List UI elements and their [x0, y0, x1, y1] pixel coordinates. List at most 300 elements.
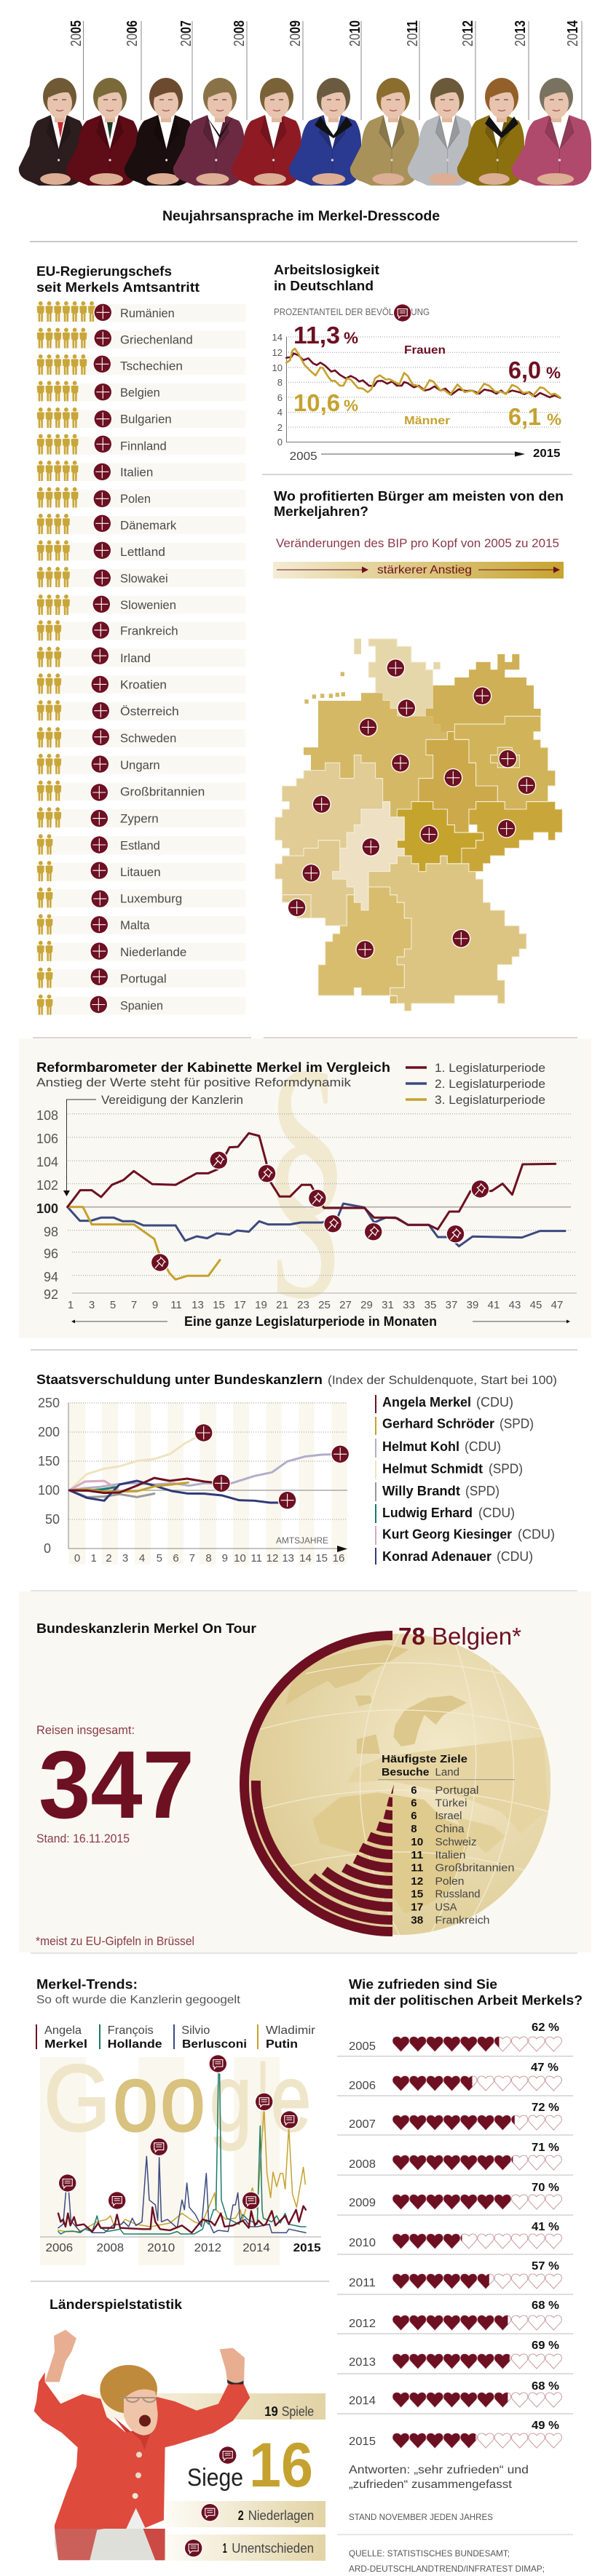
axes and gridlines: 150	[38, 1454, 60, 1468]
heading: Wo profitierten: Wo profitierten Bürger am meisten von den	[274, 489, 564, 504]
label: 2 Niederlagen: Niederlagen	[248, 2508, 314, 2523]
country names: Malta	[120, 918, 150, 932]
wedge tip	[391, 1784, 394, 1794]
axes and gridlines: 23	[297, 1299, 309, 1311]
heading: Reformbarometer: Reformbarometer der Kabinette Merkel im Vergleich	[36, 1060, 390, 1075]
bar: Spiele	[60, 2393, 325, 2420]
axes and gridlines: 50	[45, 1512, 60, 1527]
legend: politicians: Merkel	[44, 2038, 87, 2051]
table: Häufigste Ziele: Häufigste Ziele	[382, 1753, 467, 1765]
gridlines and axis: 6	[277, 392, 283, 403]
label: 19 Spiele: Spiele	[282, 2404, 314, 2419]
row 2012: 2012	[349, 2318, 376, 2330]
country names: Estland	[120, 838, 160, 852]
heading: Wie zufrieden: Wie zufrieden sind Sie	[349, 1977, 497, 1992]
legend: 2. Legislaturperiode	[435, 1077, 545, 1091]
row 2015	[349, 2420, 561, 2448]
line: Frauen	[286, 354, 560, 398]
panel: EU heads of government	[36, 264, 245, 1015]
state: Berlin	[491, 747, 519, 768]
axes and gridlines: 9	[152, 1299, 158, 1311]
panel: Reformbarometer	[19, 1011, 591, 1338]
country names: Großbritannien	[120, 785, 205, 799]
heading: Reformbarometer: Anstieg der Werte steht für positive Reformdynamik	[36, 1076, 352, 1089]
row 2007: 72 %	[532, 2102, 559, 2114]
time axis: 2006	[46, 2242, 73, 2254]
table: Häufigste Ziele: Russland	[435, 1888, 481, 1901]
year labels: 2014	[565, 20, 581, 47]
table: Häufigste Ziele: Land	[435, 1766, 459, 1778]
table: Häufigste Ziele: Portugal	[435, 1784, 479, 1797]
heading: Arbeitslosigkeit: Arbeitslosigkeit	[274, 263, 379, 277]
axes and gridlines: 5	[110, 1299, 116, 1311]
heading: EU-Regierungschefs	[36, 264, 200, 295]
year labels: 2005	[68, 20, 84, 47]
axes and gridlines: 10	[234, 1552, 246, 1565]
panel: Länderspielstatistik	[34, 2297, 325, 2561]
table: Häufigste Ziele: USA	[435, 1901, 457, 1914]
country names: Tschechien	[120, 359, 183, 373]
state: Bayern	[368, 856, 526, 1011]
axes and gridlines: 21	[276, 1299, 288, 1311]
axes and gridlines: 12	[267, 1552, 278, 1565]
country names: Bulgarien	[120, 413, 172, 426]
heading: Merkel-Trends: So oft wurde die Kanzlerin gegoogelt	[36, 1994, 241, 2006]
globe	[249, 1634, 550, 1936]
state: Saarland	[282, 895, 311, 918]
table: Häufigste Ziele: Besuche	[382, 1766, 430, 1778]
panel: satisfaction hearts	[337, 1977, 583, 2574]
country names	[120, 306, 205, 1013]
axes and gridlines: 25	[318, 1299, 331, 1311]
table: Häufigste Ziele: Israel	[435, 1810, 462, 1822]
row 2013	[349, 2340, 561, 2369]
axes and gridlines: 11	[250, 1552, 262, 1565]
year labels: 2013	[513, 20, 529, 47]
value: Männer 2015: 6,1	[508, 403, 541, 430]
gridlines and axis: 0	[277, 437, 283, 448]
table: Häufigste Ziele: Italien	[435, 1849, 466, 1861]
figure 2011	[350, 78, 419, 186]
bar: Unentschieden	[165, 2535, 325, 2561]
state: Hessen	[333, 802, 404, 910]
legend: chancellors: (CDU)	[518, 1527, 555, 1541]
plus markers	[194, 1423, 350, 1510]
line: 3. Legislaturperiode	[68, 1207, 220, 1279]
legend: politicians: Wladimir	[266, 2024, 316, 2037]
heading: Länderspielstatistik	[50, 2297, 183, 2312]
heading: Merkel-Trends	[36, 1977, 241, 2006]
axes and gridlines: 13	[192, 1299, 204, 1311]
axes and gridlines: 13	[282, 1552, 294, 1565]
subtitle: Veränderungen des BIP pro Kopf von 2005 zu 2015	[276, 536, 559, 550]
country names: Polen	[120, 492, 151, 506]
time axis: 2008	[97, 2242, 124, 2254]
country names: Spanien	[120, 999, 163, 1013]
legend: chancellors: Kurt Georg Kiesinger	[382, 1527, 512, 1541]
trend lines	[58, 2074, 306, 2234]
label: 2 Niederlagen: 2	[238, 2508, 244, 2523]
axes and gridlines: 106	[36, 1132, 58, 1146]
country names: Schweden	[120, 731, 176, 745]
label: Siege 16	[187, 2430, 313, 2500]
row 2008: 71 %	[532, 2142, 559, 2154]
axes and gridlines: 9	[222, 1552, 228, 1565]
bar: Niederlagen	[165, 2501, 325, 2527]
row 2013: 69 %	[532, 2340, 559, 2352]
label: 78 Belgien: Belgien*	[432, 1623, 521, 1650]
watermark: Google	[44, 2045, 311, 2151]
table: Häufigste Ziele: 6	[411, 1797, 417, 1810]
row 2009: 2009	[349, 2197, 376, 2209]
legend: politicians: Angela	[44, 2024, 82, 2037]
row 2013: 2013	[349, 2356, 376, 2369]
axes and gridlines: 3	[89, 1299, 95, 1311]
table: Häufigste Ziele: 38	[411, 1914, 423, 1926]
value: Frauen 2015: %	[546, 364, 561, 382]
axes and gridlines: 15	[315, 1552, 328, 1565]
legend: chancellors	[376, 1395, 555, 1565]
state: Schleswig-Holstein	[354, 639, 441, 716]
row 2005: 62 %	[532, 2022, 559, 2034]
country names: Italien	[120, 466, 153, 480]
plus badges	[89, 303, 112, 1014]
row backgrounds	[36, 304, 245, 1014]
subtitle: PROZENTANTEIL DER BEVÖLKERUNG	[274, 306, 430, 317]
row 2009: 70 %	[532, 2182, 559, 2194]
year labels: 2006	[125, 20, 141, 47]
legend: politicians	[36, 2024, 316, 2051]
row 2006: 2006	[349, 2080, 376, 2092]
time axis	[290, 448, 561, 463]
country names: Niederlande	[120, 945, 186, 959]
axes and gridlines: 94	[44, 1270, 58, 1284]
axes and gridlines	[36, 1108, 577, 1311]
legend: chancellors: Konrad Adenauer	[382, 1549, 492, 1564]
axes and gridlines: 31	[382, 1299, 394, 1311]
photo illustration: cheering Merkel	[34, 2330, 250, 2560]
title: Neujahrsansprache: Neujahrsansprache im Merkel-Dresscode	[162, 209, 440, 224]
table: Häufigste Ziele: 8	[411, 1823, 417, 1835]
row 2011	[349, 2260, 561, 2289]
row 2006: 47 %	[531, 2062, 558, 2074]
legend: chancellors: Helmut Schmidt	[382, 1461, 483, 1476]
axes and gridlines: 41	[488, 1299, 500, 1311]
country names: Dänemark	[120, 518, 177, 532]
axes and gridlines: 100	[36, 1201, 58, 1216]
big number 347: 347	[39, 1731, 194, 1838]
row 2014	[349, 2380, 561, 2407]
plus badges on states	[288, 659, 536, 959]
row 2014: 68 %	[532, 2380, 559, 2393]
country names: Frankreich	[120, 624, 178, 638]
map of Germany	[275, 639, 562, 1011]
axes and gridlines: 19	[255, 1299, 267, 1311]
axes and gridlines: 250	[38, 1396, 60, 1410]
axes and gridlines: 39	[467, 1299, 478, 1311]
country names: Irland	[120, 651, 151, 665]
axes and gridlines: 104	[36, 1155, 58, 1169]
year labels: 2007	[178, 20, 194, 47]
watermark: Google: o	[160, 2045, 205, 2151]
axes and gridlines: 1	[68, 1299, 74, 1311]
x-axis title	[71, 1314, 570, 1329]
heading: Wo profitierten: Merkeljahren?	[274, 504, 368, 519]
gridlines and axis: 10	[272, 362, 283, 373]
figure 2012	[408, 78, 474, 186]
axes and gridlines: 0	[44, 1541, 51, 1556]
table: Häufigste Ziele: Großbritannien	[435, 1862, 514, 1875]
label: 1 Unentschieden: Unentschieden	[232, 2541, 314, 2556]
country names: Litauen	[120, 865, 161, 879]
axes and gridlines: 29	[360, 1299, 373, 1311]
figure 2014	[512, 78, 591, 186]
row 2008	[349, 2142, 561, 2171]
row 2011: 2011	[349, 2277, 376, 2289]
time axis: 2005	[290, 450, 317, 463]
row 2005	[349, 2022, 561, 2053]
legend: politicians: Hollande	[108, 2038, 162, 2051]
axes and gridlines: 96	[44, 1247, 58, 1261]
axes and gridlines: 92	[44, 1287, 58, 1302]
axes and gridlines: 43	[509, 1299, 521, 1311]
state: Niedersachsen	[304, 672, 447, 817]
note: Antworten: „zufrieden“ zusammengefasst	[349, 2478, 513, 2491]
row 2015: 2015	[349, 2436, 376, 2448]
table: Häufigste Ziele: Türkei	[435, 1797, 467, 1810]
debt lines	[69, 1437, 339, 1503]
figure 2006	[66, 78, 139, 186]
value: Männer 2005: %	[344, 397, 358, 415]
axes and gridlines: 7	[189, 1552, 195, 1565]
value: Frauen 2005: %	[344, 329, 358, 347]
axes and gridlines: 1	[91, 1552, 97, 1565]
axes and gridlines: 5	[157, 1552, 162, 1565]
table: Häufigste Ziele: China	[435, 1823, 465, 1835]
axes and gridlines: 45	[530, 1299, 542, 1311]
heading: Staatsverschuldung: Staatsverschuldung unter Bundeskanzlern	[36, 1372, 323, 1387]
table: Häufigste Ziele: 12	[411, 1875, 423, 1888]
axes and gridlines: 108	[36, 1108, 58, 1123]
axes and gridlines: 7	[131, 1299, 137, 1311]
country names: Kroatien	[120, 678, 167, 691]
year labels: 2008	[232, 20, 248, 47]
heading: EU-Regierungschefs: seit Merkels Amtsantritt	[36, 280, 200, 295]
table: Häufigste Ziele: 17	[411, 1901, 423, 1914]
value: Männer 2015	[508, 403, 561, 430]
axes and gridlines: 47	[551, 1299, 563, 1311]
value: Männer 2015: %	[547, 410, 561, 429]
x-axis title: Eine ganze Legislaturperiode in Monaten	[184, 1314, 437, 1329]
time axis: 2010	[147, 2242, 175, 2254]
label: Frauen: Frauen	[404, 344, 446, 357]
note: Stand: STAND NOVEMBER JEDEN JAHRES	[349, 2512, 493, 2522]
state: Mecklenburg-Vorpommern	[426, 654, 541, 732]
heading: Wo profitierten	[274, 489, 564, 519]
note: Antworten: Antworten: „sehr zufrieden“ und	[349, 2464, 529, 2476]
time axis: 2012	[194, 2242, 221, 2254]
label: Männer: Männer	[404, 415, 450, 427]
legend: chancellors: (SPD)	[465, 1484, 500, 1498]
row 2005: 2005	[349, 2040, 376, 2053]
legend: chancellors: Angela Merkel	[382, 1395, 471, 1410]
state: Sachsen	[462, 802, 562, 872]
source: ARD-DEUTSCHLANDTREND/INFRATEST DIMAP;	[349, 2564, 545, 2574]
row 2007: 2007	[349, 2118, 376, 2131]
heading: Arbeitslosigkeit	[274, 263, 379, 293]
line: 1. Legislaturperiode	[68, 1133, 556, 1229]
legend: chancellors: (CDU)	[465, 1439, 501, 1454]
row 2010	[349, 2221, 561, 2249]
watermark: Google: o	[113, 2045, 158, 2151]
axes and gridlines	[38, 1396, 347, 1565]
legend: chancellors: (SPD)	[500, 1417, 534, 1431]
figure 2009	[232, 78, 301, 186]
heading: Staatsverschuldung: (Index der Schuldenquote, Start bei 100)	[328, 1373, 557, 1387]
table: Häufigste Ziele: 15	[411, 1888, 423, 1901]
heading: On Tour: Bundeskanzlerin Merkel On Tour	[36, 1621, 256, 1636]
axes and gridlines: 8	[205, 1552, 212, 1565]
stripes	[40, 2057, 280, 2265]
country names: Belgien	[120, 386, 160, 399]
time axis: 2015	[293, 2242, 321, 2254]
panel: Merkel on tour	[19, 1591, 591, 1952]
axes and gridlines: 200	[38, 1425, 60, 1439]
country names: Österreich	[120, 704, 179, 718]
table: Häufigste Ziele: Frankreich	[435, 1914, 489, 1926]
legend: politicians: François	[108, 2024, 154, 2037]
watermark: Google: l	[258, 2045, 268, 2151]
legend: 3. Legislaturperiode	[435, 1093, 545, 1107]
gridlines and axis: 2	[277, 422, 283, 433]
gradient legend	[273, 562, 564, 579]
panel: Staatsverschuldung	[36, 1372, 557, 1565]
figure 2005	[19, 78, 85, 186]
legend: politicians: Putin	[266, 2038, 298, 2051]
people icons	[37, 301, 95, 1015]
axes and gridlines: AMTSJAHRE	[276, 1535, 328, 1546]
axes and gridlines: 3	[122, 1552, 128, 1565]
time axis: 2014	[242, 2242, 270, 2254]
axes and gridlines: 11	[170, 1299, 182, 1311]
row 2011: 57 %	[532, 2260, 559, 2273]
watermark: Google: G	[44, 2045, 111, 2151]
pin markers	[151, 1150, 489, 1272]
legend: 1. Legislaturperiode	[435, 1061, 545, 1075]
figure 2010	[289, 78, 361, 186]
row 2010: 2010	[349, 2237, 376, 2249]
figure 2007	[125, 78, 194, 186]
state: Thüringen	[397, 802, 483, 872]
heading: EU-Regierungschefs: EU-Regierungschefs	[36, 264, 172, 279]
legend: politicians: Berlusconi	[182, 2038, 247, 2051]
table: Häufigste Ziele: Polen	[435, 1875, 465, 1888]
watermark paragraph sign: §	[261, 1011, 350, 1325]
country names: Slowenien	[120, 598, 176, 612]
row 2008: 2008	[349, 2158, 376, 2171]
country names: Ungarn	[120, 758, 160, 772]
gridlines and axis	[272, 332, 561, 448]
label: 1 Unentschieden: 1	[223, 2541, 227, 2556]
legend: chancellors: Ludwig Erhard	[382, 1506, 473, 1520]
country names: Finnland	[120, 439, 167, 453]
row lines	[337, 2056, 573, 2414]
axes and gridlines: 17	[234, 1299, 246, 1311]
table: Häufigste Ziele: 6	[411, 1784, 417, 1797]
year labels: 2009	[288, 20, 304, 47]
legend: chancellors: Helmut Kohl	[382, 1439, 459, 1454]
legend: chancellors: (CDU)	[478, 1506, 515, 1520]
axes and gridlines: 4	[139, 1552, 145, 1565]
label: 19 Spiele: 19	[264, 2404, 278, 2419]
state: Sachsen-Anhalt	[419, 732, 497, 832]
table: Häufigste Ziele: 6	[411, 1810, 417, 1822]
heading: Reformbarometer	[36, 1060, 390, 1089]
table: Häufigste Ziele	[378, 1753, 515, 1926]
state: Nordrhein-Westfalen	[275, 755, 383, 856]
state: Rheinland-Pfalz	[275, 840, 354, 926]
watermark: Google: e	[271, 2045, 311, 2151]
legend	[406, 1061, 545, 1107]
country names: Griechenland	[120, 333, 193, 346]
gridlines and axis: 4	[277, 407, 283, 418]
gradient legend: stärkerer Anstieg	[377, 564, 472, 576]
section: new year portraits	[19, 20, 591, 186]
heading: Merkel-Trends: Merkel-Trends:	[36, 1977, 138, 1992]
footnote: *meist zu EU-Gipfeln in Brüssel	[36, 1934, 194, 1948]
gridlines and axis: 12	[272, 347, 283, 358]
axes and gridlines: 102	[36, 1178, 58, 1193]
label: Siege 16: Siege	[187, 2464, 243, 2492]
heading: Staatsverschuldung	[36, 1372, 557, 1387]
value: Frauen 2015	[508, 357, 561, 383]
text: Stand: Stand: 16.11.2015	[36, 1832, 130, 1845]
legend: politicians: Silvio	[181, 2024, 210, 2037]
value: Frauen 2015: 6,0	[508, 357, 541, 383]
axes and gridlines: 15	[213, 1299, 225, 1311]
rings: visits per country	[244, 1636, 392, 1931]
text: Reisen insgesamt: Reisen insgesamt:	[36, 1723, 135, 1737]
legend: chancellors: Willy Brandt	[382, 1484, 460, 1498]
axes and gridlines: 6	[173, 1552, 179, 1565]
legend: chancellors: (CDU)	[497, 1549, 533, 1564]
row 2012	[349, 2299, 561, 2330]
stripes	[68, 1402, 347, 1565]
heading: Wie zufrieden: mit der politischen Arbeit Merkels?	[349, 1993, 583, 2008]
row 2012: 68 %	[532, 2299, 559, 2312]
legend: chancellors: Gerhard Schröder	[382, 1417, 494, 1431]
label: 78 Belgien: 78	[398, 1623, 425, 1650]
state: Baden-Württemberg	[318, 887, 411, 1003]
figure 2008	[173, 78, 245, 186]
icon: speech bubble	[393, 303, 412, 322]
line: Männer	[286, 349, 560, 397]
year lines	[83, 21, 582, 120]
axes and gridlines: 0	[74, 1552, 80, 1565]
row 2015: 49 %	[532, 2420, 559, 2432]
panel: unemployment	[272, 263, 561, 463]
source: QUELLE: STATISTISCHES BUNDESAMT;	[349, 2548, 510, 2559]
axes and gridlines: 98	[44, 1225, 58, 1239]
year labels: 2012	[460, 20, 476, 47]
row 2006	[349, 2062, 561, 2092]
table: Häufigste Ziele: 11	[411, 1862, 423, 1875]
country names: Lettland	[120, 545, 165, 559]
country names: Portugal	[120, 972, 167, 986]
heading: Wie zufrieden	[349, 1977, 583, 2008]
time axis	[40, 2237, 321, 2254]
watermark: Google: g	[210, 2045, 252, 2151]
